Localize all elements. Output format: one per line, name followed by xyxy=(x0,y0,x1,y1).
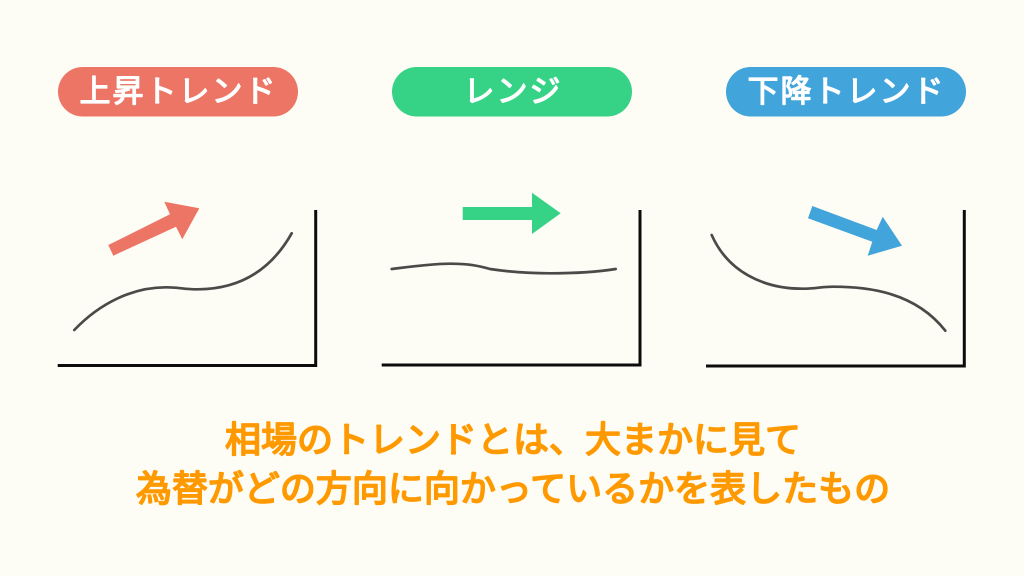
caption: 相場のトレンドとは、大まかに見て xyxy=(225,419,801,460)
price curve: range xyxy=(392,264,616,273)
caption: 為替がどの方向に向かっているかを表したもの xyxy=(136,468,890,509)
arrow: sideways xyxy=(463,193,561,234)
heading: uptrend pill xyxy=(58,67,298,116)
chart axes: range xyxy=(382,210,640,365)
arrow: down xyxy=(808,206,902,256)
panel: range xyxy=(382,67,640,365)
panel: downtrend xyxy=(706,67,966,366)
heading: uptrend pill: 上昇トレンド xyxy=(80,74,278,109)
heading: downtrend pill: 下降トレンド xyxy=(748,74,946,109)
heading: range pill: レンジ xyxy=(464,74,562,109)
caption xyxy=(136,419,890,509)
arrow: up xyxy=(108,202,199,256)
chart axes: uptrend xyxy=(58,210,316,366)
heading: range pill xyxy=(392,67,632,116)
panel: uptrend xyxy=(58,67,316,366)
heading: downtrend pill xyxy=(726,67,966,116)
chart axes: downtrend xyxy=(706,210,964,366)
price curve: uptrend xyxy=(74,233,292,330)
price curve: downtrend xyxy=(712,235,945,331)
